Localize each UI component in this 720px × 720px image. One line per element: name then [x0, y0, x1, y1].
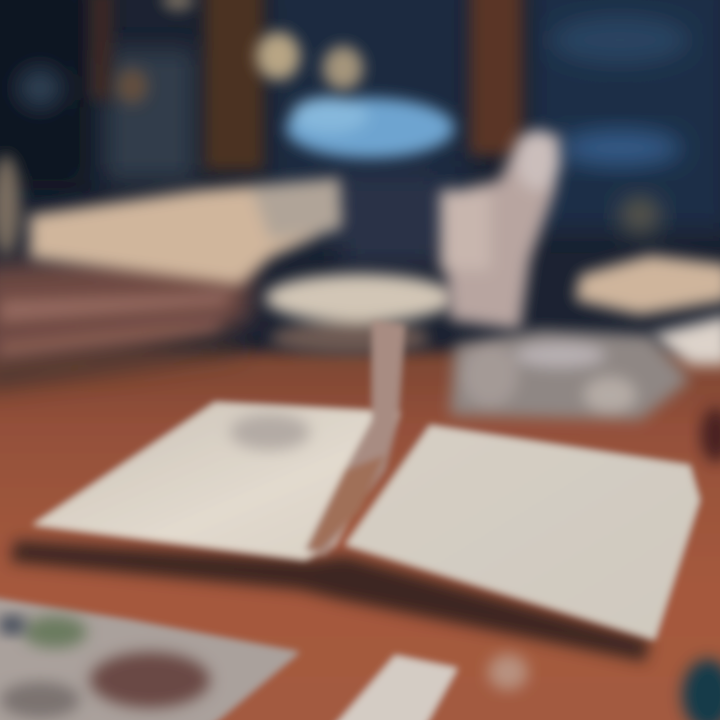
bookmark ribbon [305, 320, 405, 555]
red object at right edge [700, 407, 720, 463]
window background [0, 0, 720, 380]
book shadow [10, 540, 650, 662]
glass vase [440, 130, 560, 330]
magazine bottom left [0, 596, 300, 720]
white card bottom [322, 655, 458, 720]
small round object bottom [488, 654, 528, 690]
cream cushion left [0, 155, 342, 285]
teal object bottom right [682, 659, 720, 720]
left page [32, 402, 400, 560]
open book [32, 402, 700, 640]
page marks [230, 414, 310, 450]
cream papers right [575, 255, 720, 365]
wooden window posts [90, 0, 522, 170]
blue glow in window [286, 97, 454, 158]
grey glass objects [450, 330, 690, 420]
warm lights [116, 0, 363, 104]
white bowl [265, 274, 455, 354]
stacked books left [0, 250, 250, 390]
desk surface [0, 352, 720, 720]
right page [345, 425, 700, 640]
